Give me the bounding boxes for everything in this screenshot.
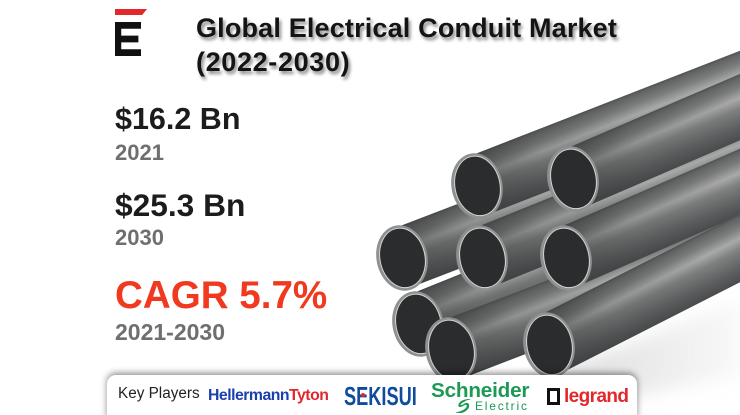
key players label: Key Players bbox=[118, 385, 200, 402]
logo: HellermannTyton: HellermannTyton bbox=[208, 387, 328, 404]
pipe: middle right bbox=[534, 22, 740, 296]
logo: Schneider Electric: Electric bbox=[475, 399, 529, 413]
title bbox=[196, 13, 620, 82]
floor shadow bbox=[500, 300, 740, 395]
pipe: front left bbox=[419, 135, 740, 388]
pipe: lower back left bbox=[386, 101, 740, 362]
key players card bbox=[107, 375, 637, 415]
logo: red bar and E bbox=[115, 9, 147, 56]
stat: 2030 label: 2030 bbox=[115, 225, 164, 250]
title: (2022-2030) bbox=[196, 47, 350, 77]
logo: Schneider Electric: Schneider bbox=[431, 379, 529, 402]
pipe: back top left bbox=[445, 0, 740, 224]
stat: CAGR period: 2021-2030 bbox=[115, 319, 225, 345]
pipe: back top right bbox=[541, 0, 740, 217]
stat: 2021 label: 2021 bbox=[115, 140, 164, 165]
pipe: middle left bbox=[370, 43, 740, 296]
logo: Legrand: legrand bbox=[564, 386, 628, 407]
pipe: front right bbox=[517, 83, 740, 383]
logo: Sekisui: SEKISUI bbox=[344, 381, 417, 411]
title: Global Electrical Conduit Market bbox=[196, 13, 617, 43]
stat: 2030 value: $25.3 Bn bbox=[115, 187, 245, 223]
stat: 2021 value: $16.2 Bn bbox=[115, 102, 240, 136]
pipe: middle centre bbox=[450, 35, 740, 296]
stat: CAGR: CAGR 5.7% bbox=[115, 274, 327, 317]
logo: Schneider Electric bbox=[431, 379, 530, 413]
